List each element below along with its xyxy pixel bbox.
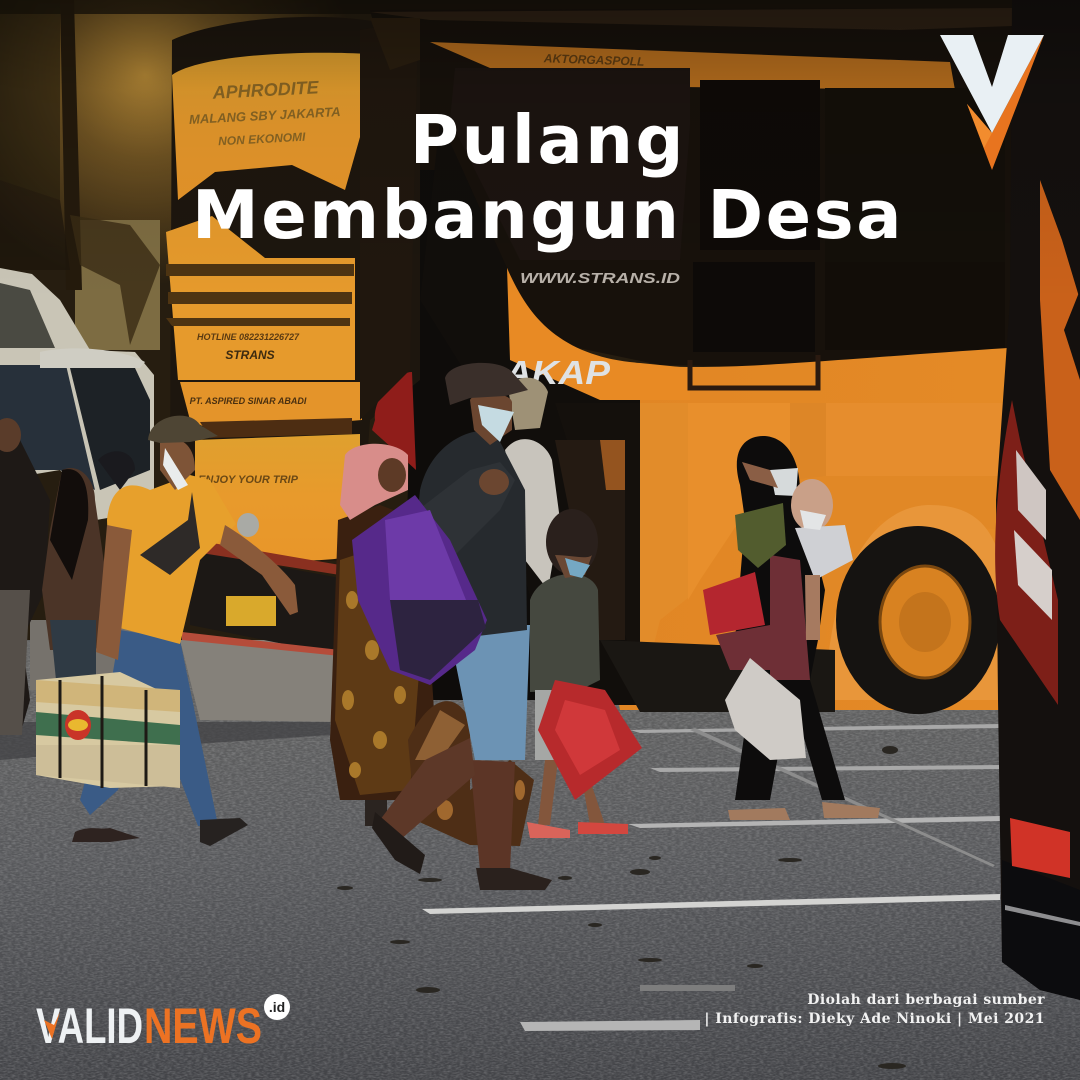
man in background white shirt (505, 378, 560, 590)
title: Membangun Desa (192, 176, 904, 254)
man in yellow shirt carrying box (72, 416, 298, 846)
title (192, 101, 904, 254)
logo mark: id badge (264, 994, 290, 1020)
source credit: | Infografis: Dieky Ade Ninoki | Mei 2021 (704, 1011, 1045, 1027)
title: Pulang (410, 101, 686, 179)
road (0, 620, 1080, 1080)
woman with pink scarf (330, 444, 440, 826)
people in background left (0, 418, 135, 735)
bus lettering: AKAP (504, 354, 611, 391)
bus lettering: NON EKONOMI (218, 130, 306, 148)
bus lettering (189, 51, 680, 486)
red plastic bag (538, 680, 642, 800)
logo: ValidNews wordmark (36, 998, 262, 1048)
bus front (166, 17, 420, 656)
bus side orange body (400, 120, 1008, 710)
sky and trees (0, 0, 1080, 720)
bus lettering: PT. ASPIRED SINAR ABADI (190, 396, 307, 406)
logo mark: id badge: .id (269, 999, 285, 1015)
bus lettering: ENJOY YOUR TRIP (198, 474, 299, 486)
bus lettering: AKTORGASPOLL (543, 51, 645, 69)
bus side upper dark windows (370, 8, 1012, 372)
source credit: Diolah dari berbagai sumber (807, 992, 1045, 1008)
bus lettering: STRANS (225, 348, 275, 362)
bus lettering: APHRODITE (211, 77, 320, 103)
bus lettering: MALANG SBY JAKARTA (189, 104, 341, 127)
bus wheel (600, 526, 1000, 714)
bus at right (995, 0, 1080, 1000)
bus lettering: HOTLINE 082231226727 (197, 332, 300, 342)
dark photo tint over top (0, 0, 1080, 300)
batik bag on ground (408, 701, 534, 846)
child (527, 509, 628, 838)
white van at left (0, 268, 154, 520)
icon: V logo top right (940, 35, 1044, 170)
box bag (36, 672, 180, 788)
bus lettering: WWW.STRANS.ID (520, 270, 680, 287)
woman in hijab with baby (703, 436, 880, 820)
source credit (704, 992, 1045, 1027)
man with purple backpack (352, 363, 552, 890)
